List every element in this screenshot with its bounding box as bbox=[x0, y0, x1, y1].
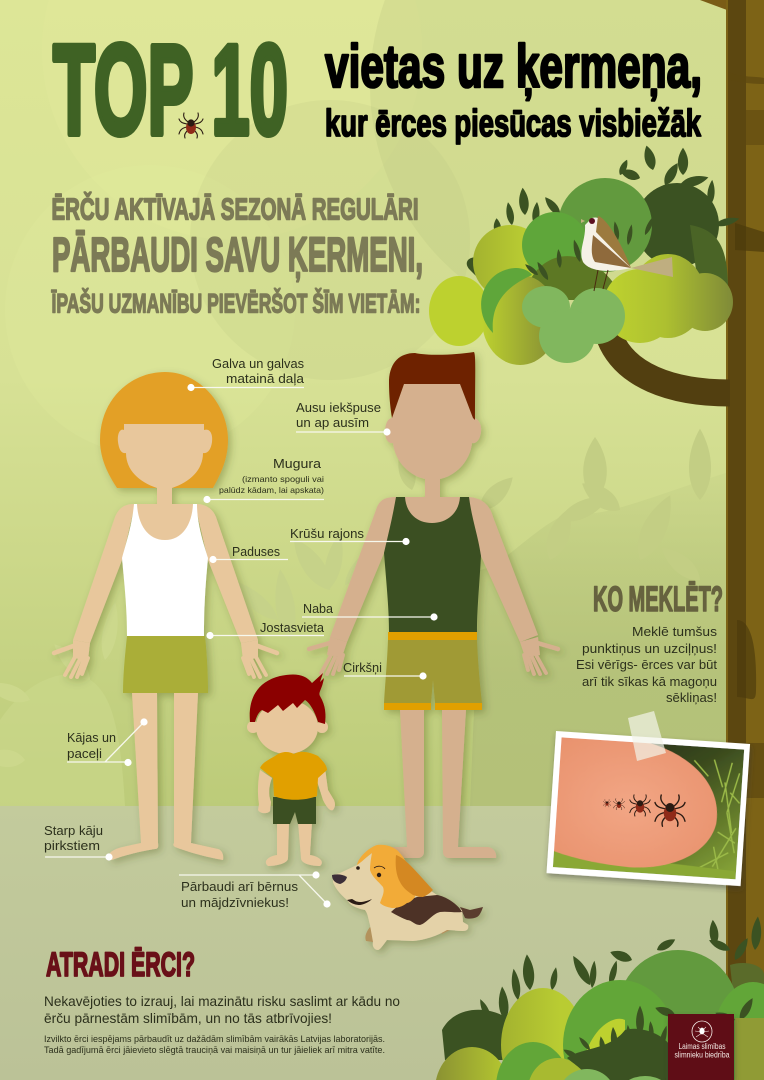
text: Ko meklēt body: sēkliņas! bbox=[666, 690, 717, 705]
label: Jostasvieta: Jostasvieta bbox=[260, 620, 325, 635]
label: Pārbaudi arī bērnus: Pārbaudi arī bērnus bbox=[181, 879, 299, 894]
label: Galva bbox=[187, 356, 305, 391]
text: Ko meklēt body bbox=[576, 624, 718, 705]
label: Cirkšņi bbox=[343, 660, 427, 680]
label: Naba bbox=[302, 601, 438, 621]
tree branch bbox=[610, 338, 730, 393]
photo: ticks on a fingertip bbox=[546, 711, 750, 886]
label: Ausu: un ap ausīm bbox=[296, 415, 369, 430]
text: Ko meklēt body: arī tik sīkas kā magoņu bbox=[582, 674, 717, 689]
text: Atradi ērci body bbox=[44, 993, 400, 1056]
text: Atradi ērci body: ērču pārnestām slimībām, un no tās atbrīvojies! bbox=[44, 1010, 332, 1026]
label: Kājas un paceļi: Kājas un bbox=[67, 730, 116, 745]
label: Pārbaudi arī bērnus: un mājdzīvniekus! bbox=[181, 895, 289, 910]
text: Ko meklēt body: Esi vērīgs- ērces var būt bbox=[576, 657, 717, 672]
man shorts bbox=[384, 640, 482, 703]
label: Mugura: Mugura bbox=[273, 456, 322, 471]
subheading: ĪPAŠU UZMANĪBU PIEVĒRŠOT ŠĪM VIETĀM: bbox=[51, 288, 420, 318]
child shorts bbox=[273, 797, 316, 824]
icon: tick in title bbox=[179, 113, 203, 138]
subheading bbox=[51, 190, 423, 318]
woman figure bbox=[54, 372, 277, 860]
child figure bbox=[247, 673, 335, 866]
label: Mugura: palūdz kādam, lai apskata) bbox=[219, 485, 324, 495]
tree trunk bbox=[700, 0, 764, 1080]
title: TOP 10: TOP 10 bbox=[53, 19, 288, 162]
child hair bbox=[250, 673, 325, 724]
label: Mugura: (izmanto spoguli vai bbox=[242, 474, 324, 484]
subheading: PĀRBAUDI SAVU ĶERMENI, bbox=[52, 229, 423, 282]
logo: Laimas slimības bbox=[678, 1042, 726, 1051]
icon: tick sizes bbox=[603, 795, 685, 826]
label: Krūšu rajons bbox=[290, 526, 410, 545]
man hair bbox=[389, 352, 475, 420]
label: Kājas un paceļi bbox=[67, 718, 148, 766]
man figure bbox=[309, 352, 558, 858]
label: Starp kāju pirkstiem bbox=[44, 823, 113, 861]
dog bbox=[332, 845, 483, 950]
label: Pārbaudi arī bērnus bbox=[179, 871, 331, 910]
label: Paduses bbox=[209, 544, 288, 563]
label: Krūšu rajons: Krūšu rajons bbox=[290, 526, 365, 541]
tree canopy bbox=[429, 144, 740, 365]
label: Cirkšņi: Cirkšņi bbox=[343, 660, 382, 675]
background plants bbox=[0, 429, 735, 806]
label: Ausu: Ausu iekšpuse bbox=[296, 400, 381, 415]
text: Atradi ērci body: Izvilkto ērci iespējams pārbaudīt uz dažādām slimībām vairākās Latvijas laboratorijās. bbox=[44, 1034, 385, 1045]
logo bbox=[668, 1014, 734, 1080]
label: Kājas un paceļi: paceļi bbox=[67, 746, 102, 761]
text: Ko meklēt body: Meklē tumšus bbox=[632, 624, 718, 639]
text: Ko meklēt body: punktiņus un uzciļņus! bbox=[582, 641, 717, 656]
subheading: ĒRČU AKTĪVAJĀ SEZONĀ REGULĀRI bbox=[52, 190, 418, 226]
man tank top bbox=[384, 497, 481, 632]
child shirt bbox=[260, 752, 327, 800]
label: Mugura bbox=[203, 456, 324, 503]
label: Ausu bbox=[296, 400, 391, 436]
label: Galva: matainā daļa bbox=[226, 371, 305, 386]
label: Jostasvieta bbox=[206, 620, 325, 639]
label: Paduses: Paduses bbox=[232, 544, 280, 559]
text: Atradi ērci body: Nekavējoties to izrauj, lai mazinātu risku saslimt ar kādu no bbox=[44, 993, 400, 1009]
label: Starp kāju pirkstiem: pirkstiem bbox=[44, 838, 100, 853]
text: Atradi ērci body: Tadā gadījumā ērci jāievieto slēgtā trauciņā vai maisiņā un tur jāieliek arī mitra vatīte. bbox=[44, 1045, 385, 1056]
bird bbox=[581, 216, 673, 291]
label: Naba: Naba bbox=[303, 601, 334, 616]
woman tank top bbox=[122, 504, 208, 636]
woman skirt bbox=[123, 636, 208, 693]
bottom bush bbox=[435, 916, 764, 1080]
logo: slimnieku biedrība bbox=[674, 1050, 730, 1060]
label: Galva: Galva un galvas bbox=[212, 356, 304, 371]
label: Starp kāju pirkstiem: Starp kāju bbox=[44, 823, 103, 838]
heading: Atradi ērci: ATRADI ĒRCI? bbox=[46, 946, 195, 984]
tape bbox=[628, 711, 666, 761]
floor bbox=[0, 806, 735, 1080]
